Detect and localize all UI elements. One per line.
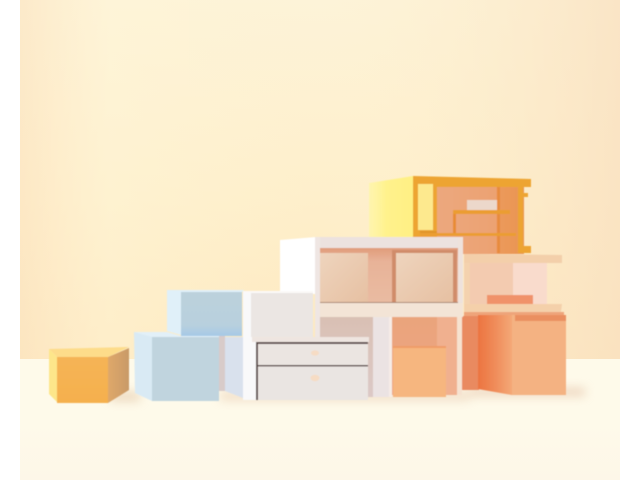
shelf support [453,214,456,233]
big orange cube [461,315,566,395]
box two [392,250,457,302]
cabinet frame [413,176,531,253]
bottom board [464,304,562,313]
yellow window [418,184,433,230]
front [57,357,108,403]
left face [478,315,512,395]
top frame [315,237,463,248]
back column [461,316,479,390]
lilac side [225,337,243,398]
yellow side [49,349,57,402]
left post [464,255,470,313]
yellow orange box [49,347,129,403]
left post [315,237,320,337]
floor shadows [110,388,585,401]
middle shelf board [320,303,463,317]
lower left bay [320,317,373,397]
top strip [515,315,566,321]
white strip [243,291,256,400]
shelf upper [453,210,510,214]
floor [20,359,620,480]
upper blue light side [167,290,244,335]
orange box [393,346,446,397]
right lower post [457,317,462,395]
drawer unit [252,337,369,400]
lower orange bay [392,317,437,395]
left white drawer tower [225,291,313,400]
lower post [373,317,389,397]
top white box [251,293,313,337]
background wall [20,0,620,359]
upper blue face [181,292,242,336]
interior [470,263,513,304]
drawer two [258,366,368,400]
group: furniture [49,176,566,403]
top board [464,254,562,263]
cabinet interior [437,186,524,254]
top [49,347,129,357]
gap panel [219,336,225,391]
white shelf unit [280,237,463,397]
drawer top [252,337,369,342]
white side [280,237,316,294]
orange box on shelf [487,295,533,304]
knob one [311,350,319,356]
right small shelf unit [464,254,564,316]
upper interior [320,248,458,303]
lower blue face [152,337,219,401]
knob two [310,375,320,381]
blue boxes [134,290,244,401]
front face [512,315,566,395]
yellow side panel [369,176,413,240]
lower blue side [134,332,152,401]
top orange cabinet [369,176,531,254]
lower blue top [134,332,219,338]
box one [320,253,368,302]
dark back [256,342,368,400]
book [467,200,497,210]
right post [458,237,463,317]
shelf lower [420,233,516,236]
drawer one [258,344,368,365]
vertical divider [497,187,500,253]
right side [108,348,129,403]
